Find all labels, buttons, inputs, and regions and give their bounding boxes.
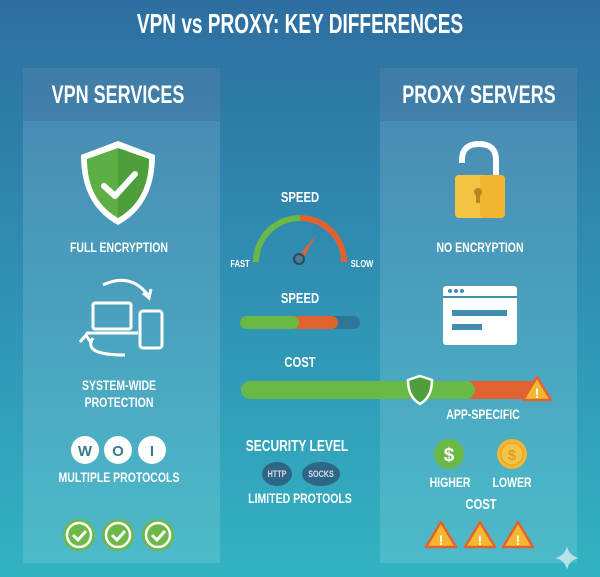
icon: dollar coins: $ [444, 445, 455, 466]
panel: vpn services [23, 68, 220, 563]
title: VPN vs PROXY: KEY DIFFERENCES [137, 8, 463, 39]
icon: dollar coins: $ [508, 447, 517, 464]
icon: warnings: ! [478, 532, 482, 548]
text: slow: SLOW [351, 259, 373, 270]
icon: devices [80, 280, 162, 355]
text: system-wide protection: SYSTEM-WIDE [82, 377, 156, 393]
text: fast: FAST [230, 259, 250, 270]
chart: speed bar [240, 316, 360, 329]
icon: protocol circles: I [150, 443, 154, 460]
text: speed gauge label: SPEED [281, 189, 319, 206]
text: cost right: COST [465, 496, 497, 513]
protocol pills: HTTP [268, 469, 287, 479]
chart: cost bar [241, 376, 551, 404]
text: lower: LOWER [492, 474, 532, 490]
icon: dollar coins [434, 439, 527, 469]
text: cost label: COST [284, 354, 316, 371]
text: system-wide protection [82, 377, 156, 410]
text: speed bar label: SPEED [281, 290, 319, 307]
icon: warnings: ! [516, 532, 520, 548]
chart: speed gauge [256, 218, 344, 264]
icon: open padlock [455, 144, 505, 218]
panel: proxy servers [380, 68, 577, 563]
icon: protocol circles [71, 436, 166, 464]
heading: vpn services: VPN SERVICES [52, 81, 184, 109]
text: app-specific: APP-SPECIFIC [446, 406, 520, 422]
protocol pills [262, 462, 340, 486]
chart: cost bar: ! [535, 385, 539, 401]
icon: check circles [63, 519, 174, 551]
icon: warnings [426, 522, 533, 548]
icon: browser window [443, 286, 517, 345]
text: full encryption: FULL ENCRYPTION [70, 239, 168, 255]
text: no encryption: NO ENCRYPTION [436, 239, 524, 255]
text: security level: SECURITY LEVEL [246, 438, 348, 455]
heading: proxy servers: PROXY SERVERS [402, 81, 556, 109]
icon: warnings: ! [439, 532, 443, 548]
text: multiple protocols: MULTIPLE PROTOCOLS [59, 469, 179, 485]
text: higher: HIGHER [430, 474, 470, 490]
icon: sparkle [555, 546, 579, 570]
icon: shield [81, 141, 155, 225]
text: limited protocols: LIMITED PROTOOLS [248, 490, 352, 506]
icon: protocol circles: O [112, 443, 124, 460]
icon: protocol circles: W [78, 443, 93, 460]
protocol pills: SOCKS [308, 469, 334, 479]
text: system-wide protection: PROTECTION [85, 394, 153, 410]
